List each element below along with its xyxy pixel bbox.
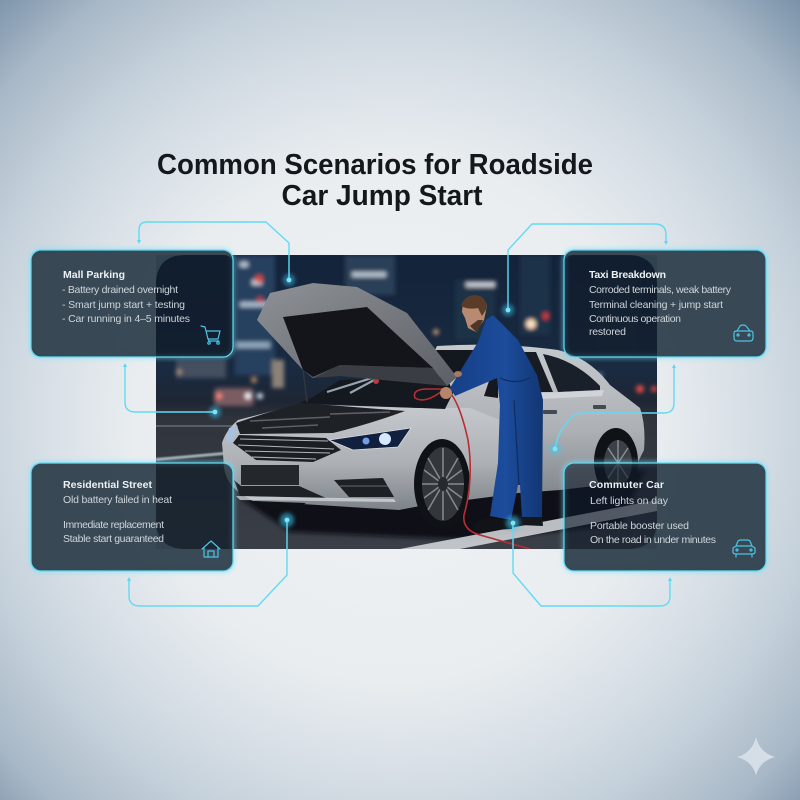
boots [500, 528, 512, 530]
headlight [329, 428, 411, 450]
text block: Terminal cleaning + jump start [589, 299, 723, 311]
front body [222, 404, 505, 510]
text block: - Smart jump start + testing [62, 299, 185, 311]
icon: shopping cart [201, 326, 220, 344]
text block: On the road in under minutes [590, 534, 716, 546]
engine bay [236, 403, 405, 434]
text block: - Car running in 4–5 minutes [62, 313, 190, 325]
connector: bottom right [506, 516, 672, 606]
icon: house [202, 541, 220, 557]
road markings [156, 452, 224, 461]
grille [233, 435, 341, 462]
connector: top left, upper [137, 222, 295, 286]
coverall [450, 315, 543, 520]
text block: restored [589, 326, 626, 338]
text block: Continuous operation [589, 313, 681, 325]
open hood [257, 283, 457, 386]
rear of car body [420, 345, 644, 500]
text block [590, 495, 716, 546]
car shadow [240, 470, 645, 540]
heading: Mall Parking [63, 269, 125, 281]
rear wheel [594, 428, 638, 486]
text block: Immediate replacement [63, 519, 164, 531]
panel: Mall Parking [31, 250, 233, 357]
head [462, 303, 487, 332]
front wheel [414, 439, 470, 529]
connector: bottom left [127, 513, 294, 606]
title: Car Jump Start [282, 180, 483, 212]
red jumper cable [414, 389, 530, 549]
icon: sparkle watermark [737, 737, 775, 775]
icon: car [733, 540, 755, 557]
central photo: mechanic jump starting a silver car at night [156, 255, 657, 549]
panel: Taxi Breakdown [564, 250, 766, 357]
text block [62, 284, 190, 325]
mechanic [440, 295, 543, 531]
title [157, 149, 593, 212]
text block: Old battery failed in heat [63, 494, 172, 506]
heading: Taxi Breakdown [589, 269, 666, 281]
icon: taxi [734, 325, 753, 341]
heading: Commuter Car [589, 479, 664, 491]
text block [589, 284, 732, 338]
side windows [543, 354, 600, 392]
text block: - Battery drained overnight [62, 284, 178, 296]
underbody [254, 501, 306, 504]
text block: Corroded terminals, weak battery [589, 284, 732, 296]
text block: Left lights on day [590, 495, 669, 507]
connector: top right, upper [502, 224, 668, 316]
panel: Commuter Car [564, 463, 766, 571]
text block: Stable start guaranteed [63, 533, 164, 545]
connector: top right, lower [549, 364, 676, 455]
heading: Residential Street [63, 479, 152, 491]
title: Common Scenarios for Roadside [157, 149, 593, 181]
text block [63, 494, 172, 545]
panel: Residential Street [31, 463, 233, 571]
hands [440, 387, 452, 399]
text block: Portable booster used [590, 520, 689, 532]
licence plate [241, 465, 299, 485]
connector: top left, lower [123, 363, 221, 418]
lower intake [234, 480, 326, 498]
blurred city lights [176, 255, 657, 406]
windshield under hood [300, 377, 453, 409]
